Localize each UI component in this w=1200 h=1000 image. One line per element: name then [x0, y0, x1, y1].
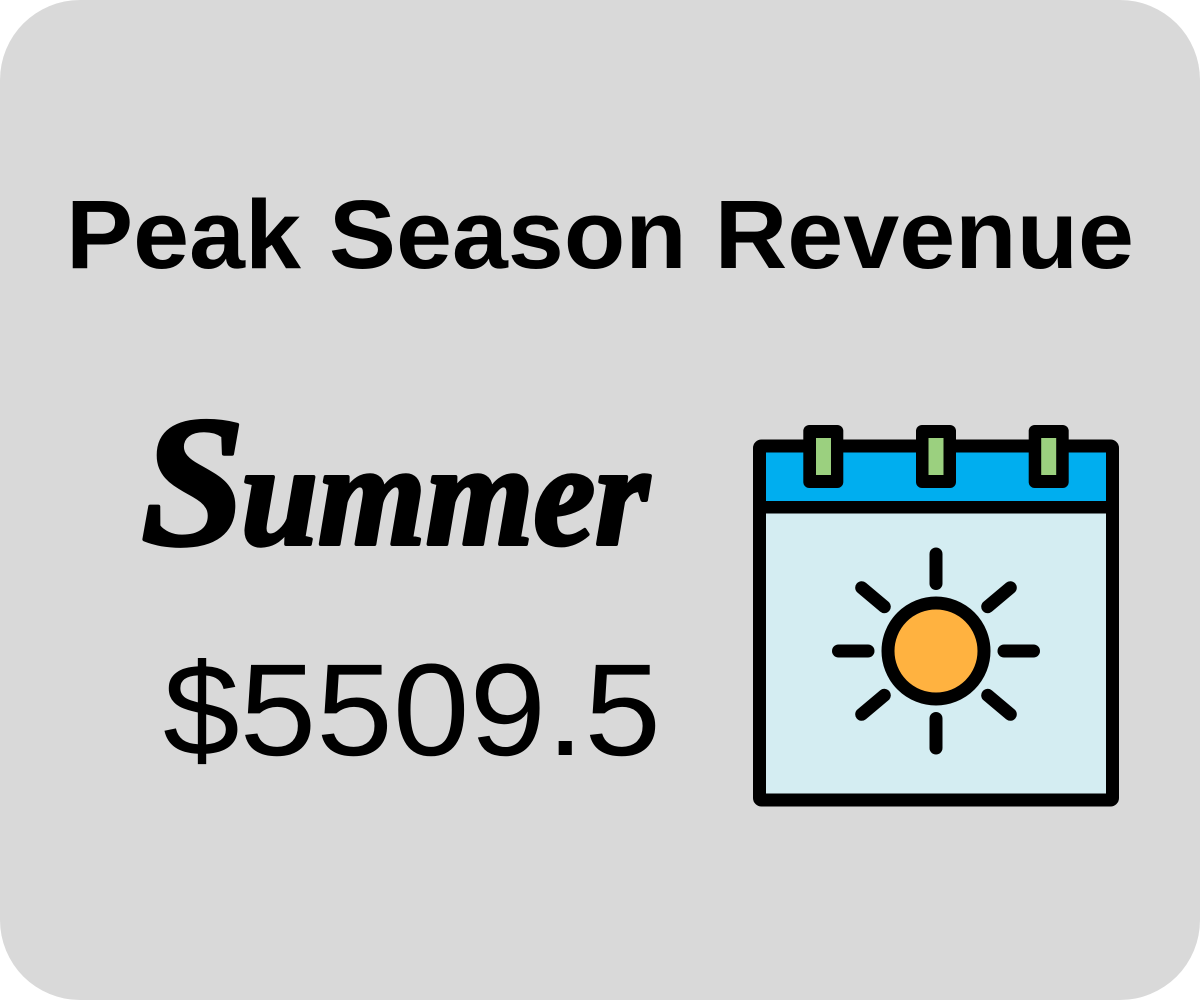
calendar ring middle	[916, 425, 956, 488]
season label: S	[141, 379, 245, 585]
revenue value: $5509.5	[163, 636, 661, 783]
sun rays	[838, 554, 1034, 748]
calendar header	[766, 452, 1106, 501]
calendar divider	[766, 501, 1106, 514]
icon: sun	[838, 554, 1034, 748]
title: Peak Season Revenue	[66, 180, 1134, 289]
icon: calendar with sun	[760, 425, 1112, 800]
calendar page	[760, 446, 1112, 800]
calendar ring left	[803, 425, 843, 488]
calendar ring right	[1029, 425, 1069, 488]
season label: ummer	[241, 414, 650, 576]
sun disc	[888, 603, 984, 699]
